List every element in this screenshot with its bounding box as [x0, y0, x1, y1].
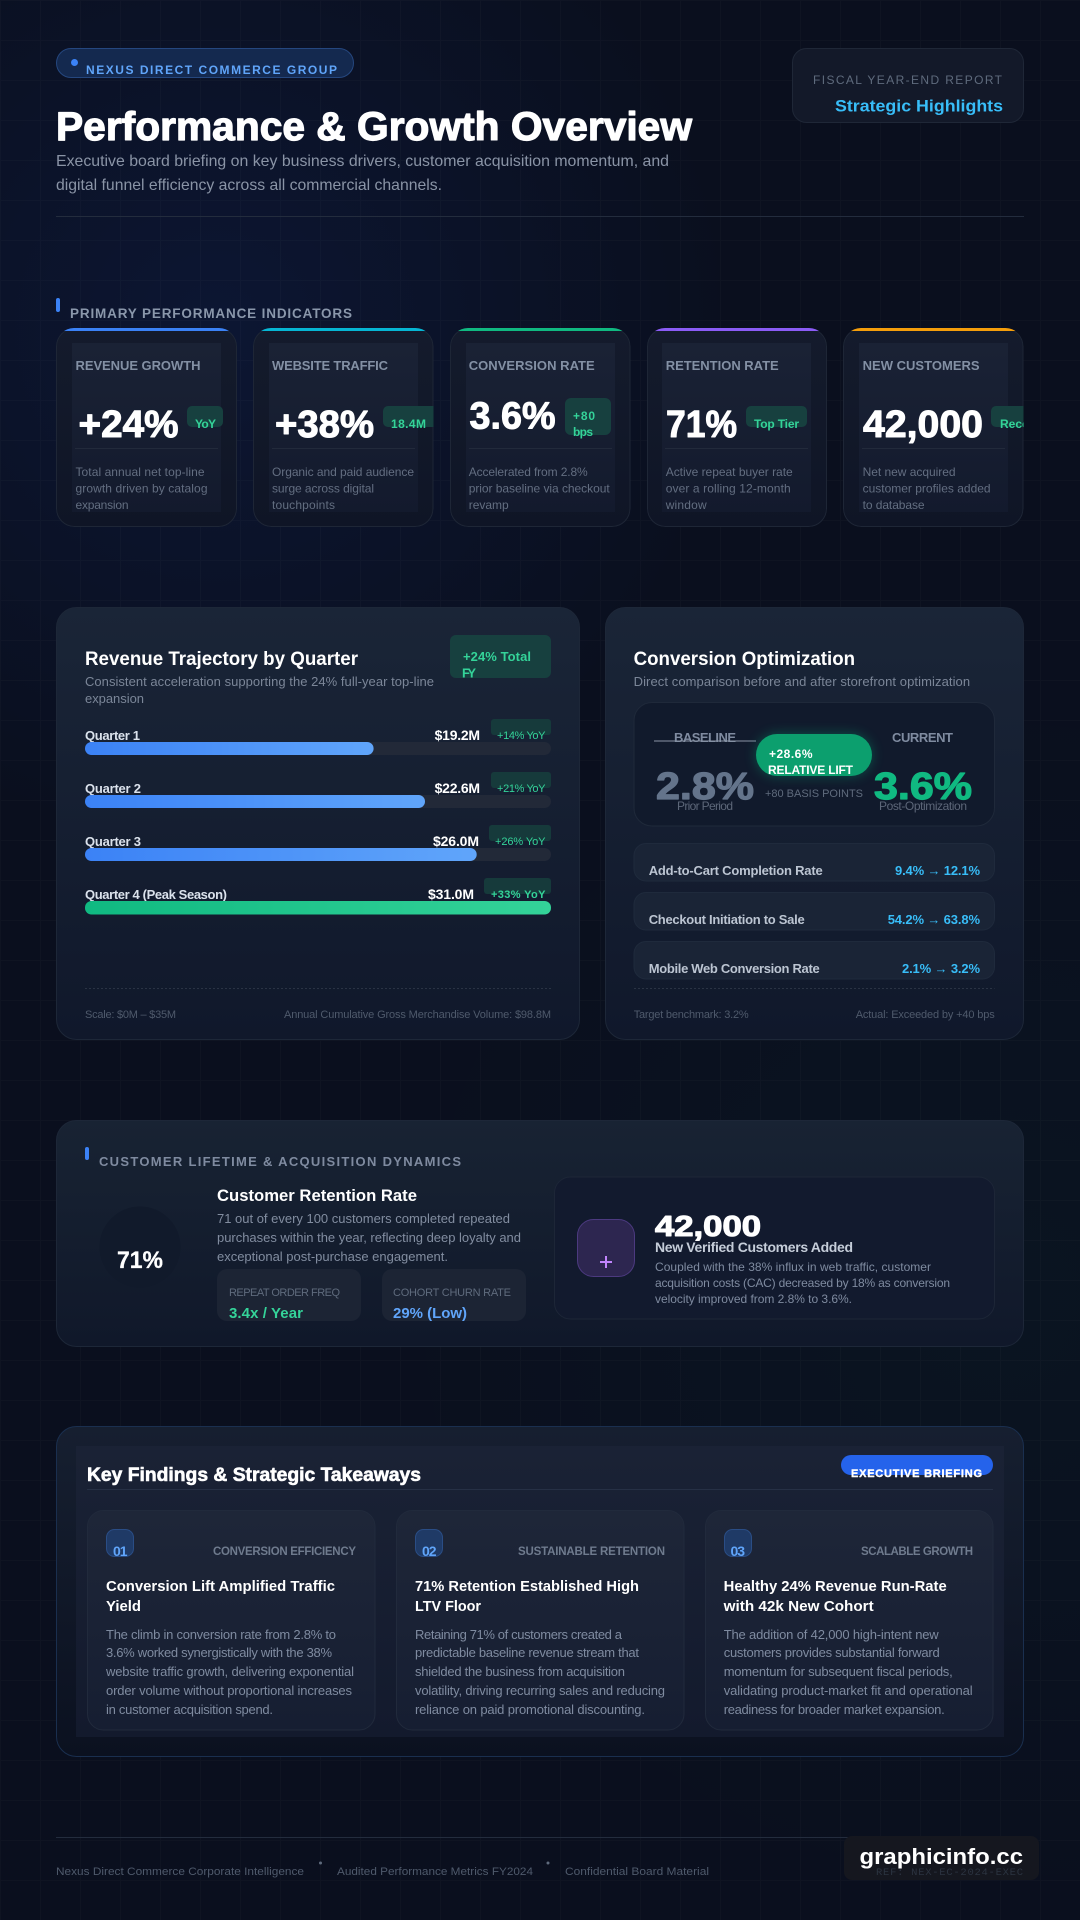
- finding card 1: Yield: [106, 1599, 141, 1615]
- panel footer: Actual: Exceeded by +40 bps: [856, 1009, 995, 1021]
- executive briefing pill: [841, 1455, 993, 1480]
- baseline metric: [654, 730, 756, 813]
- title: Performance & Growth Overview: [56, 105, 693, 149]
- chart footer: [85, 1009, 551, 1021]
- section heading: CUSTOMER LIFETIME & ACQUISITION DYNAMICS: [99, 1154, 461, 1169]
- bar: quarter 2: Quarter 2: [85, 781, 141, 796]
- panel: revenue trajectory: [56, 608, 580, 1040]
- metric row: mobile web: Mobile Web Conversion Rate: [649, 961, 820, 976]
- KPI card: website traffic: +38%: [275, 404, 374, 446]
- current metric: Post-Optimization: [879, 799, 967, 813]
- KPI card: new customers: 42,000: [863, 404, 983, 446]
- chart footer: Annual Cumulative Gross Merchandise Volume: $98.8M: [284, 1009, 551, 1021]
- KPI card: conversion rate: revamp: [469, 498, 509, 512]
- retention gauge: [100, 1206, 180, 1288]
- bar: quarter 4: +33% YoY: [491, 889, 546, 901]
- KPI card: revenue growth: [56, 328, 237, 526]
- new customers card: acquisition costs (CAC) decreased by 18% as conversion: [655, 1276, 950, 1290]
- icon: plus: [578, 1220, 634, 1276]
- finding card 2: predictable baseline revenue stream that: [415, 1645, 639, 1660]
- baseline metric: Prior Period: [677, 799, 733, 813]
- KPI card: revenue growth: Total annual net top-line: [76, 465, 205, 479]
- KPI card: retention rate: Top Tier: [754, 417, 799, 431]
- metric row: mobile web: 2.1% → 3.2%: [902, 961, 980, 976]
- heading: Key Findings & Strategic Takeaways: [87, 1465, 421, 1486]
- finding card 1: [88, 1510, 375, 1730]
- bar: quarter 1: Quarter 1: [85, 728, 140, 743]
- finding card 1: Conversion Lift Amplified Traffic: [106, 1579, 335, 1595]
- bar: quarter 3: +26% YoY: [495, 836, 546, 848]
- finding card 3: [706, 1510, 993, 1730]
- bar: quarter 1: [85, 719, 551, 755]
- relative lift pill: RELATIVE LIFT: [768, 763, 854, 777]
- KPI card: retention rate: over a rolling 12-month: [666, 482, 791, 496]
- KPI card: new customers: Record: [1000, 417, 1041, 431]
- before and after comparison: +80 BASIS POINTS: [765, 788, 863, 800]
- footer: [56, 1836, 1039, 1880]
- current metric: CURRENT: [892, 730, 953, 745]
- KPI card: revenue growth: REVENUE GROWTH: [76, 358, 200, 373]
- current metric: 3.6%: [874, 766, 972, 808]
- header: [56, 48, 1024, 217]
- section heading: [85, 1147, 461, 1169]
- stat: cohort churn rate: [382, 1269, 526, 1322]
- KPI card: conversion rate: [450, 328, 631, 526]
- section heading: primary indicators: PRIMARY PERFORMANCE INDICATORS: [70, 306, 352, 321]
- finding card 2: [396, 1510, 684, 1730]
- KPI card: conversion rate: prior baseline via checkout: [469, 482, 610, 496]
- stat: repeat order frequency: [217, 1269, 361, 1322]
- retention gauge: 71%: [117, 1247, 163, 1274]
- finding card 3: SCALABLE GROWTH: [861, 1546, 973, 1558]
- finding card 2: 71% Retention Established High: [415, 1579, 639, 1595]
- KPI card: new customers: customer profiles added: [863, 482, 991, 496]
- KPI card: retention rate: 71%: [666, 404, 737, 446]
- finding card 3: readiness for broader market expansion.: [724, 1702, 945, 1717]
- footer notes: Nexus Direct Commerce Corporate Intelligence: [56, 1866, 304, 1878]
- finding card 1: in customer acquisition spend.: [106, 1702, 273, 1717]
- KPI card: retention rate: RETENTION RATE: [666, 358, 779, 373]
- retention text: 71 out of every 100 customers completed repeated: [217, 1211, 510, 1226]
- KPI card: new customers: to database: [863, 498, 925, 512]
- before and after comparison: [634, 702, 994, 826]
- report badge: [792, 48, 1024, 122]
- finding card 3: 03: [730, 1543, 745, 1559]
- stat: repeat order frequency: 3.4x / Year: [229, 1305, 303, 1322]
- report badge: Strategic Highlights: [835, 96, 1003, 116]
- panel footer: [634, 1009, 995, 1021]
- bar: quarter 4: [85, 878, 551, 914]
- panel heading: [634, 649, 970, 689]
- bar: quarter 1: $19.2M: [435, 727, 480, 743]
- finding card 3: customers provides substantial forward: [724, 1645, 940, 1660]
- KPI card: conversion rate: CONVERSION RATE: [469, 358, 595, 373]
- chart footer: Scale: $0M – $35M: [85, 1009, 176, 1021]
- panel heading: Conversion Optimization: [634, 649, 855, 670]
- finding card 1: 01: [113, 1543, 128, 1559]
- finding card 3: with 42k New Cohort: [723, 1599, 874, 1615]
- footer notes: Audited Performance Metrics FY2024: [337, 1866, 533, 1878]
- bar: quarter 3: Quarter 3: [85, 834, 141, 849]
- bar: quarter 2: +21% YoY: [497, 783, 546, 795]
- bar: quarter 2: $22.6M: [435, 780, 480, 796]
- finding card 1: CONVERSION EFFICIENCY: [213, 1546, 356, 1558]
- watermark: REF: NEX-EC-2024-EXEC: [876, 1867, 1023, 1879]
- KPI card: conversion rate: +80: [573, 409, 595, 423]
- finding card 1: order volume without proportional increases: [106, 1683, 352, 1698]
- metric row: add to cart: 9.4% → 12.1%: [895, 863, 980, 878]
- watermark: [844, 1836, 1039, 1880]
- panel footer: Target benchmark: 3.2%: [634, 1009, 749, 1021]
- subtitle: digital funnel efficiency across all commercial channels.: [56, 177, 442, 194]
- KPI card: revenue growth: YoY: [195, 417, 216, 431]
- metric row: checkout: [634, 892, 994, 930]
- chart heading: Revenue Trajectory by Quarter: [85, 649, 359, 670]
- executive briefing pill: EXECUTIVE BRIEFING: [851, 1468, 982, 1480]
- new customers card: 42,000: [655, 1211, 761, 1243]
- footer notes: [56, 1862, 709, 1878]
- stat: cohort churn rate: 29% (Low): [393, 1305, 467, 1322]
- bar: quarter 4: Quarter 4 (Peak Season): [85, 887, 227, 902]
- KPI card: conversion rate: bps: [573, 425, 593, 439]
- KPI card: new customers: [843, 328, 1024, 527]
- brand pill: NEXUS DIRECT COMMERCE GROUP: [86, 63, 337, 77]
- chart heading: Consistent acceleration supporting the 24% full-year top-line: [85, 674, 434, 689]
- bar: quarter 4: $31.0M: [428, 886, 474, 902]
- KPI card: website traffic: WEBSITE TRAFFIC: [272, 358, 389, 373]
- new customers card: New Verified Customers Added: [655, 1239, 853, 1255]
- bar: quarter 1: +14% YoY: [497, 730, 546, 742]
- retention text: Customer Retention Rate: [217, 1186, 417, 1205]
- chart heading: expansion: [85, 691, 144, 706]
- retention text: [217, 1186, 521, 1264]
- bar: quarter 3: $26.0M: [433, 833, 479, 849]
- KPI card: website traffic: touchpoints: [272, 498, 335, 512]
- metric row: add to cart: Add-to-Cart Completion Rate: [649, 863, 823, 878]
- finding card 2: volatility, driving recurring sales and reducing: [415, 1683, 665, 1698]
- metric row: checkout: 54.2% → 63.8%: [888, 912, 980, 927]
- panel: conversion optimization: [606, 608, 1024, 1040]
- KPI card: website traffic: surge across digital: [272, 482, 374, 496]
- retention text: purchases within the year, reflecting deep loyalty and: [217, 1230, 521, 1245]
- finding card 3: Healthy 24% Revenue Run-Rate: [724, 1579, 947, 1595]
- chart heading: [85, 649, 434, 706]
- metric row: mobile web: [634, 942, 994, 979]
- panel: customer lifetime and acquisition: [56, 1120, 1024, 1346]
- stat: repeat order frequency: REPEAT ORDER FREQ: [229, 1287, 340, 1299]
- KPI card: retention rate: window: [665, 498, 707, 512]
- section heading: primary indicators: [56, 298, 352, 321]
- total badge: FY: [462, 666, 476, 680]
- finding card 2: reliance on paid promotional discounting.: [415, 1702, 645, 1717]
- bar: quarter 2: [85, 772, 551, 808]
- bar: quarter 3: [85, 825, 551, 861]
- finding card 2: Retaining 71% of customers created a: [415, 1627, 623, 1642]
- KPI card: new customers: Net new acquired: [863, 465, 956, 479]
- baseline metric: BASELINE: [674, 730, 736, 745]
- panel: key findings: [56, 1426, 1024, 1756]
- finding card 3: The addition of 42,000 high-intent new: [724, 1627, 939, 1642]
- panel heading: Direct comparison before and after storefront optimization: [634, 674, 970, 689]
- current metric: [874, 730, 972, 813]
- KPI card: revenue growth: growth driven by catalog: [76, 482, 208, 496]
- finding card 1: website traffic growth, delivering exponential: [105, 1664, 354, 1679]
- finding card 3: validating product-market fit and operational: [724, 1683, 973, 1698]
- finding card 2: SUSTAINABLE RETENTION: [518, 1546, 665, 1558]
- KPI card: revenue growth: expansion: [76, 498, 128, 512]
- KPI card: conversion rate: 3.6%: [470, 396, 556, 438]
- finding card 1: 3.6% worked synergistically with the 38%: [106, 1645, 332, 1660]
- KPI card: website traffic: Organic and paid audience: [272, 465, 414, 479]
- subtitle: Executive board briefing on key business drivers, customer acquisition momentum, and: [56, 153, 669, 170]
- finding card 2: LTV Floor: [415, 1599, 481, 1615]
- footer notes: Confidential Board Material: [565, 1866, 709, 1878]
- KPI card: retention rate: [647, 328, 827, 526]
- metric row: checkout: Checkout Initiation to Sale: [649, 912, 805, 927]
- bar chart: quarterly revenue: [85, 719, 551, 914]
- relative lift pill: [756, 734, 872, 777]
- finding card 2: shielded the business from acquisition: [415, 1664, 625, 1679]
- KPI card: retention rate: Active repeat buyer rate: [666, 465, 793, 479]
- KPI card: website traffic: 18.4M: [391, 417, 426, 431]
- metric row: add to cart: [634, 844, 994, 881]
- subtitle: [56, 153, 669, 194]
- KPI card: conversion rate: Accelerated from 2.8%: [469, 465, 588, 479]
- finding card 3: momentum for subsequent fiscal periods,: [724, 1664, 953, 1679]
- report badge: FISCAL YEAR-END REPORT: [813, 73, 1003, 87]
- KPI card: revenue growth: +24%: [78, 404, 178, 446]
- new customers card: Coupled with the 38% influx in web traffic, customer: [655, 1260, 931, 1274]
- stat: cohort churn rate: COHORT CHURN RATE: [393, 1287, 511, 1299]
- finding card 1: The climb in conversion rate from 2.8% to: [106, 1627, 336, 1642]
- new customers card: velocity improved from 2.8% to 3.6%.: [655, 1292, 852, 1306]
- brand pill: [56, 48, 354, 78]
- new customers card: [554, 1177, 994, 1319]
- watermark: graphicinfo.cc: [860, 1844, 1023, 1869]
- total badge: [450, 635, 551, 680]
- retention text: exceptional post-purchase engagement.: [217, 1249, 448, 1264]
- KPI card: new customers: NEW CUSTOMERS: [863, 358, 980, 373]
- total badge: +24% Total: [463, 649, 531, 664]
- KPI card: website traffic: [253, 328, 439, 526]
- panel: KPI cards: [56, 328, 1051, 526]
- baseline metric: 2.8%: [656, 766, 754, 808]
- relative lift pill: +28.6%: [769, 747, 813, 761]
- finding card 2: 02: [422, 1543, 437, 1559]
